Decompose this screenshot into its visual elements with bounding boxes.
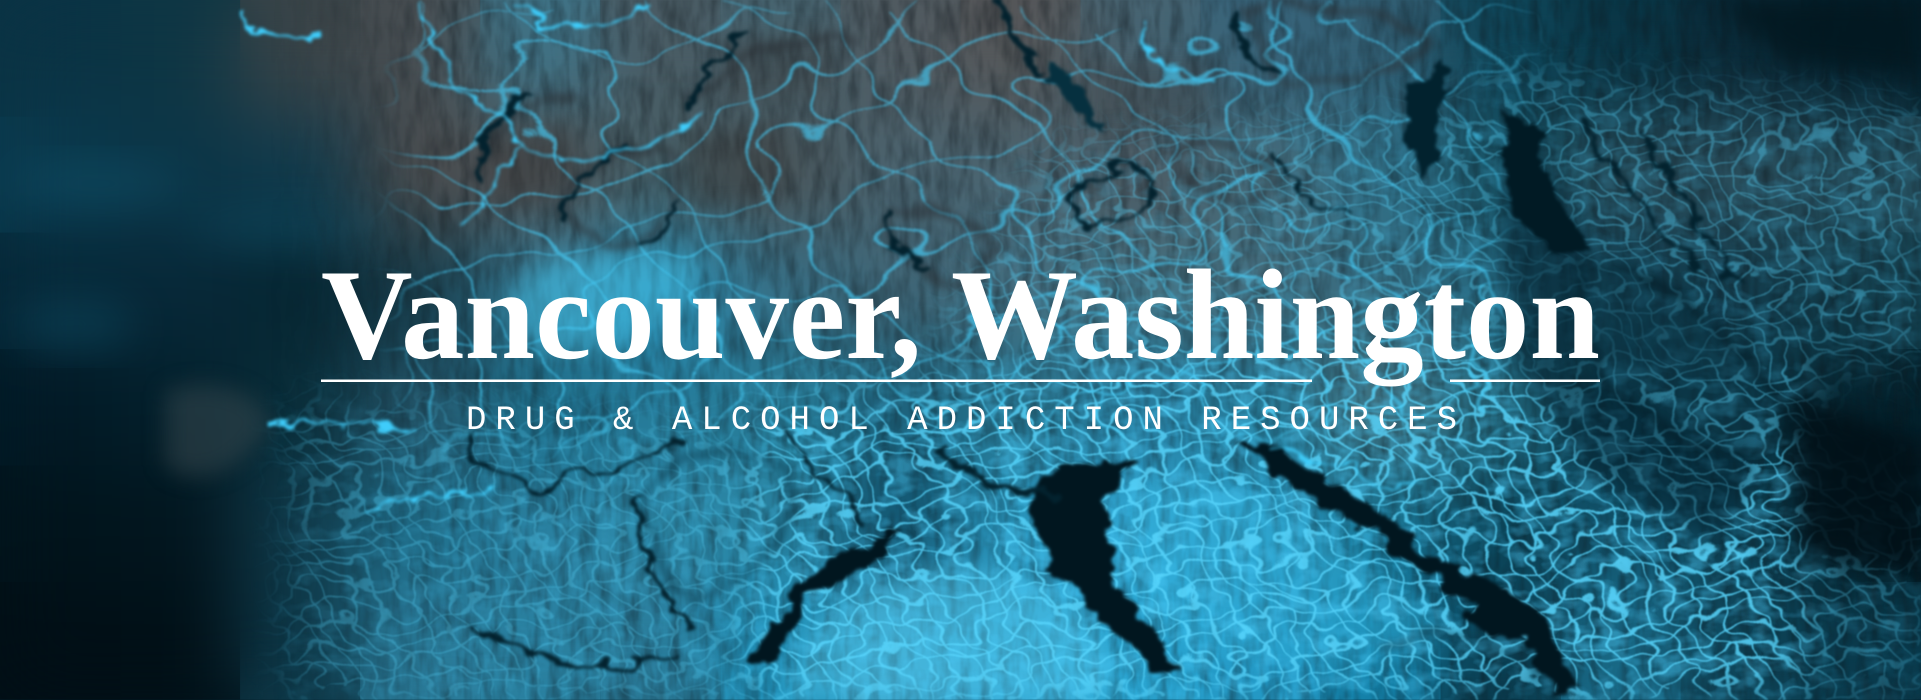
subtitle: DRUG & ALCOHOL ADDICTION RESOURCES: [466, 402, 1457, 440]
title underline: [321, 380, 1600, 382]
deep shadow pockets on the right: [1501, 0, 1921, 576]
dark crevices between rocks: [466, 6, 1740, 689]
title: Vancouver, Washington: [321, 243, 1600, 387]
mottled light patches: [283, 76, 1921, 700]
sunlit rock faces and shaded pockets: [165, 31, 1439, 700]
soft water streaks on the left: [12, 164, 398, 349]
sparse net across the upper rocks: [382, 0, 1542, 466]
fine net on the lower right rocks: [272, 56, 1921, 700]
bright caustic highlights: [239, 2, 1421, 515]
rock outlines: [472, 5, 1795, 686]
